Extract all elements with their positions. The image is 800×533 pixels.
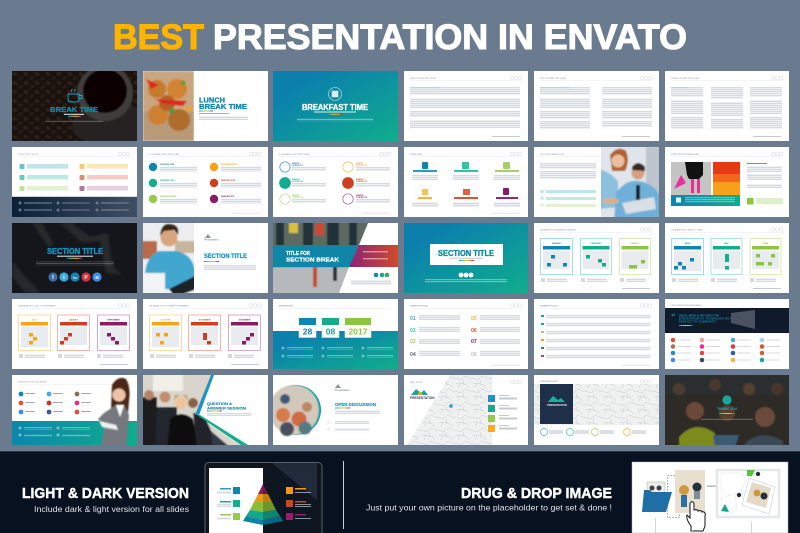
white panel bbox=[199, 375, 268, 445]
photo: toy figures bbox=[675, 470, 705, 513]
teal arc bbox=[271, 385, 321, 435]
icon list bbox=[20, 164, 128, 191]
number text bbox=[419, 315, 520, 366]
teal title band bbox=[273, 245, 359, 267]
slide header: LETS CONNECT OUR SOCIAL MEDIA bbox=[671, 304, 702, 307]
slide: numbers list bbox=[404, 299, 528, 369]
slide header: YOUR OFFICE LOCATION bbox=[540, 380, 559, 383]
icon: green callout bbox=[747, 198, 783, 204]
slide: three column text bbox=[665, 71, 789, 141]
body text bbox=[671, 87, 782, 137]
slide: breakfast time bbox=[273, 71, 398, 141]
map pin bbox=[449, 404, 453, 408]
heading: TITLE FOR bbox=[286, 251, 311, 257]
contact text bbox=[499, 395, 517, 430]
contact text bbox=[549, 430, 646, 434]
slide: iconic text with images bbox=[665, 147, 789, 217]
tablet left labels bbox=[217, 487, 240, 520]
slide header: CALENDAR 2017 [ OCTOBER TO DECEMBER ] bbox=[149, 304, 189, 308]
slide: calendar October to December bbox=[143, 299, 268, 369]
dark quote band: “ bbox=[671, 312, 676, 322]
feature labels: CONCEPT 01 bbox=[292, 165, 303, 167]
tablet mock-up bbox=[205, 462, 322, 533]
photo: runners bbox=[270, 220, 400, 297]
body text bbox=[540, 163, 596, 179]
icon: mug bbox=[328, 88, 342, 100]
calendar: May: MAY bbox=[724, 242, 729, 245]
slide: number list bullets bbox=[534, 299, 659, 369]
body text bbox=[410, 87, 520, 137]
slide header: MAP SLIDE bbox=[410, 381, 423, 384]
slide: calendar January to March bbox=[534, 223, 659, 293]
dark band bbox=[12, 197, 137, 217]
dark logo card: PRESENTATION bbox=[547, 403, 567, 407]
feature text bbox=[292, 167, 390, 214]
text block bbox=[207, 410, 251, 416]
slide header: CONTACT BY SOCIAL MEDIA bbox=[18, 380, 47, 384]
slide: two column text bbox=[534, 71, 659, 141]
image placeholder outline bbox=[668, 476, 680, 518]
body text bbox=[540, 87, 652, 137]
contact icons bbox=[540, 428, 630, 436]
calendar notes bbox=[672, 278, 781, 289]
title: BEST bbox=[113, 18, 204, 57]
numbers: 08 bbox=[471, 352, 477, 358]
list text bbox=[546, 314, 650, 366]
icons: social: in bbox=[73, 275, 77, 280]
feature labels: FEATURE THREE bbox=[160, 195, 177, 198]
slide: section title with man bbox=[143, 223, 268, 293]
feature labels: CONCEPT 03 bbox=[292, 197, 303, 199]
slide: thank you bbox=[665, 375, 789, 445]
feature labels: FEATURE ONE bbox=[160, 163, 175, 166]
teal band bbox=[12, 421, 137, 445]
calendar notes bbox=[150, 354, 259, 365]
calendar: February: FEBRUARY bbox=[590, 242, 602, 245]
footer divider bbox=[343, 461, 344, 529]
white top-right corner bbox=[359, 223, 398, 245]
social labels bbox=[677, 340, 780, 360]
calendar: August: AUGUST bbox=[69, 318, 78, 322]
icon titles bbox=[413, 170, 519, 199]
pyramid chart bbox=[243, 484, 283, 525]
slide header: THREE COLUMN TEXT SLIDE bbox=[671, 78, 700, 80]
slide header: NUMBER LIST SLIDE 02 bbox=[540, 306, 558, 308]
quote text: SERVICE TO COMMUNITY. bbox=[679, 322, 717, 324]
slide header: 6 COLUMNS ICONIC TEXT SLIDE bbox=[279, 154, 310, 156]
slide: iconic grid bbox=[404, 147, 528, 217]
text block bbox=[36, 256, 114, 265]
slide: social media quote bbox=[665, 299, 789, 369]
slide header: TEXT WITH IMAGE SLIDE bbox=[540, 153, 565, 156]
icons: social bbox=[459, 273, 473, 277]
numbers: 04 bbox=[410, 352, 416, 358]
feature labels: SAMPLE bbox=[292, 178, 300, 181]
slide: six features filled circles bbox=[143, 147, 268, 217]
drag and drop panel bbox=[632, 462, 788, 533]
footer left caption: Include dark & light version for all slides bbox=[34, 504, 189, 514]
calendar: January: JANUARY bbox=[552, 242, 562, 245]
text block bbox=[199, 110, 248, 120]
heading: SECTION TITLE bbox=[438, 248, 494, 258]
quote text: SOCIAL MEDIA IS NOT ABOUT THE bbox=[679, 314, 719, 318]
white bottom panel bbox=[339, 267, 398, 293]
slide: open discussion bbox=[273, 375, 398, 445]
gradient band bbox=[349, 245, 398, 267]
tablet right labels bbox=[286, 487, 311, 520]
slide: calendar July to September bbox=[12, 299, 137, 369]
slide: question and answer bbox=[143, 375, 268, 445]
feature labels: SAMPLE bbox=[356, 162, 364, 165]
heading: LUNCH bbox=[199, 96, 225, 105]
feature labels: SAMPLE bbox=[292, 194, 300, 197]
icons: social bbox=[374, 273, 389, 277]
icon: coffee cup bbox=[68, 89, 82, 102]
text block bbox=[747, 163, 782, 188]
dark quote band bbox=[665, 308, 789, 333]
contact icons bbox=[488, 395, 495, 432]
social list bbox=[19, 392, 79, 414]
footer left heading: LIGHT & DARK VERSION bbox=[22, 485, 189, 502]
slide header: 6 COLUMNS ICONIC TEXT SLIDE bbox=[149, 154, 180, 156]
slide: section title dark bbox=[12, 223, 137, 293]
feature labels: FEATURE SIX bbox=[221, 195, 235, 198]
feature circles bbox=[149, 163, 218, 203]
calendar: September: SEPTEMBER bbox=[107, 320, 120, 322]
feature labels: CONCEPT 06 bbox=[356, 197, 367, 199]
calendar: April: APRIL bbox=[684, 242, 691, 245]
slide: section title teal bbox=[404, 223, 528, 293]
text block bbox=[335, 408, 380, 414]
slide: icon text with dark band bbox=[12, 147, 137, 217]
numbers: 07 bbox=[471, 339, 477, 345]
numbers: 03 bbox=[410, 339, 416, 345]
slide header: ICONIC SLIDE bbox=[410, 154, 423, 156]
heading line 2: ANSWER SESSION bbox=[207, 405, 246, 410]
numbers bbox=[410, 316, 477, 358]
numbers: 05 bbox=[471, 316, 477, 322]
heading: THANK YOU bbox=[717, 407, 738, 411]
calendar notes bbox=[541, 278, 650, 289]
slide header: NUMBERS LIST SLIDE bbox=[410, 306, 429, 308]
footer band bbox=[0, 451, 800, 533]
icons: social: P bbox=[84, 275, 88, 281]
icons: social: ✉ bbox=[95, 275, 99, 280]
photo: businesswoman bbox=[98, 378, 130, 447]
logo: Presentation bbox=[204, 238, 219, 242]
slide header: ICONIC TEXT WITH IMAGE SLIDE bbox=[671, 153, 700, 156]
feature labels: FEATURE FIVE bbox=[221, 179, 236, 182]
slide: event date bbox=[273, 299, 398, 369]
icons: social bbox=[48, 272, 102, 282]
slide: map with dark card bbox=[534, 375, 659, 445]
icons: social: t bbox=[63, 275, 65, 281]
numbers: 02 bbox=[410, 328, 416, 334]
heading: OPEN DISCUSSION bbox=[335, 402, 377, 407]
photo: two people at a tablet bbox=[601, 147, 659, 217]
feature labels: SAMPLE bbox=[356, 178, 364, 181]
heading: QUESTION & bbox=[207, 401, 232, 406]
slide header: CALENDAR 2017 [ JANUARY TO MARCH ] bbox=[540, 228, 576, 232]
calendar notes bbox=[19, 354, 128, 365]
feature labels: FEATURE FOUR bbox=[221, 163, 237, 166]
subheading bbox=[45, 114, 103, 122]
map band bbox=[534, 384, 659, 425]
icon text bbox=[412, 175, 520, 214]
text block bbox=[204, 261, 256, 270]
text block bbox=[351, 280, 391, 285]
quote text: EXPLOITATION OF TECHNOLOGY BUT bbox=[679, 318, 732, 320]
slide header: ONE COLUMN TEXT SLIDE bbox=[410, 78, 437, 80]
slide: text with image bbox=[534, 147, 659, 217]
numbers: 01 bbox=[410, 316, 416, 322]
logo: Presentation bbox=[335, 389, 350, 392]
feature labels: CONCEPT 02 bbox=[292, 181, 303, 183]
icon: teal circle bbox=[722, 395, 732, 405]
icons: social: f bbox=[52, 275, 54, 281]
social labels bbox=[25, 393, 91, 412]
feature labels: SAMPLE bbox=[292, 162, 300, 165]
date card: 08: 08 bbox=[326, 326, 335, 336]
feature labels: FEATURE TWO bbox=[160, 179, 175, 182]
feature labels bbox=[160, 163, 237, 198]
numbers: 06 bbox=[471, 328, 477, 334]
calendar: November: NOVEMBER bbox=[199, 320, 211, 322]
feature labels: CONCEPT 05 bbox=[356, 181, 367, 183]
icon: hand cursor bbox=[687, 502, 705, 531]
bullets bbox=[327, 420, 369, 431]
icon: folder bbox=[642, 482, 672, 512]
social list bbox=[671, 338, 764, 362]
slide: lunch break time bbox=[143, 71, 268, 141]
text block bbox=[425, 279, 507, 283]
feature circles bbox=[280, 162, 354, 204]
map bbox=[407, 375, 492, 445]
heading: SECTION TITLE bbox=[47, 246, 103, 256]
logo: PRESENTATION bbox=[410, 396, 435, 400]
slide header: EVENT DATE SLIDE bbox=[279, 304, 294, 308]
slide: contact by social media bbox=[12, 375, 137, 445]
heading line 2: SECTION BREAK bbox=[286, 257, 340, 263]
diagonal accents bbox=[195, 375, 248, 445]
quote text bbox=[679, 314, 732, 324]
date card: 2017: 2017 bbox=[349, 326, 368, 336]
heading: SECTION TITLE bbox=[204, 253, 247, 260]
arrow bbox=[707, 482, 739, 490]
heading: BREAKFAST TIME bbox=[302, 103, 368, 112]
panel guide lines bbox=[655, 518, 752, 533]
slide: six features outlined circles bbox=[273, 147, 398, 217]
photo: food bbox=[143, 71, 194, 141]
calendar: March: MARCH bbox=[631, 242, 639, 245]
slide: map with logo bbox=[404, 375, 528, 445]
photo: pink umbrella bbox=[671, 162, 711, 195]
photo: man at laptop bbox=[143, 223, 194, 293]
photo: audience bbox=[140, 372, 245, 448]
photo: crowd circle bbox=[269, 385, 319, 436]
band notes bbox=[363, 251, 388, 259]
date card: 28: 28 bbox=[303, 326, 312, 336]
bullets bbox=[540, 190, 596, 207]
heading: BREAK TIME bbox=[50, 105, 98, 114]
bullets bbox=[541, 315, 544, 357]
calendar: October: OCTOBER bbox=[161, 320, 171, 322]
teal callout bbox=[671, 195, 740, 206]
calendar: December: DECEMBER bbox=[239, 320, 251, 322]
slide: one column text bbox=[404, 71, 528, 141]
slide header: ICONIC TEXT SLIDE bbox=[18, 154, 39, 156]
feature text bbox=[160, 166, 261, 214]
photo: colour leaves bbox=[713, 162, 740, 195]
feature labels: SAMPLE bbox=[356, 194, 364, 197]
event notes bbox=[282, 347, 393, 358]
slide: break time bbox=[12, 71, 137, 141]
feature labels bbox=[292, 162, 367, 199]
footer right heading: DRUG & DROP IMAGE bbox=[461, 485, 612, 502]
photo: dark crowd bbox=[662, 372, 792, 448]
icons bbox=[422, 162, 510, 195]
result layout bbox=[717, 470, 779, 517]
title: PRESENTATION IN ENVATO bbox=[213, 18, 687, 57]
text block bbox=[297, 112, 373, 121]
slide header: TWO COLUMN TEXT SLIDE bbox=[540, 78, 567, 80]
feature labels: CONCEPT 04 bbox=[356, 164, 367, 167]
slide: title for section break bbox=[273, 223, 398, 293]
calendar: June: JUNE bbox=[763, 243, 769, 245]
text block bbox=[701, 413, 753, 420]
heading line 2: BREAK TIME bbox=[199, 102, 247, 111]
slide: calendar April to June bbox=[665, 223, 789, 293]
slide header: CALENDAR 2017 [ APRIL TO JUNE ] bbox=[671, 228, 703, 232]
footer right caption: Just put your own picture on the placeholder to get set & done ! bbox=[366, 502, 612, 512]
slide header: CALENDAR 2017 [ JULY TO SEPTEMBER ] bbox=[18, 304, 56, 308]
calendar: July: JULY bbox=[32, 320, 38, 322]
